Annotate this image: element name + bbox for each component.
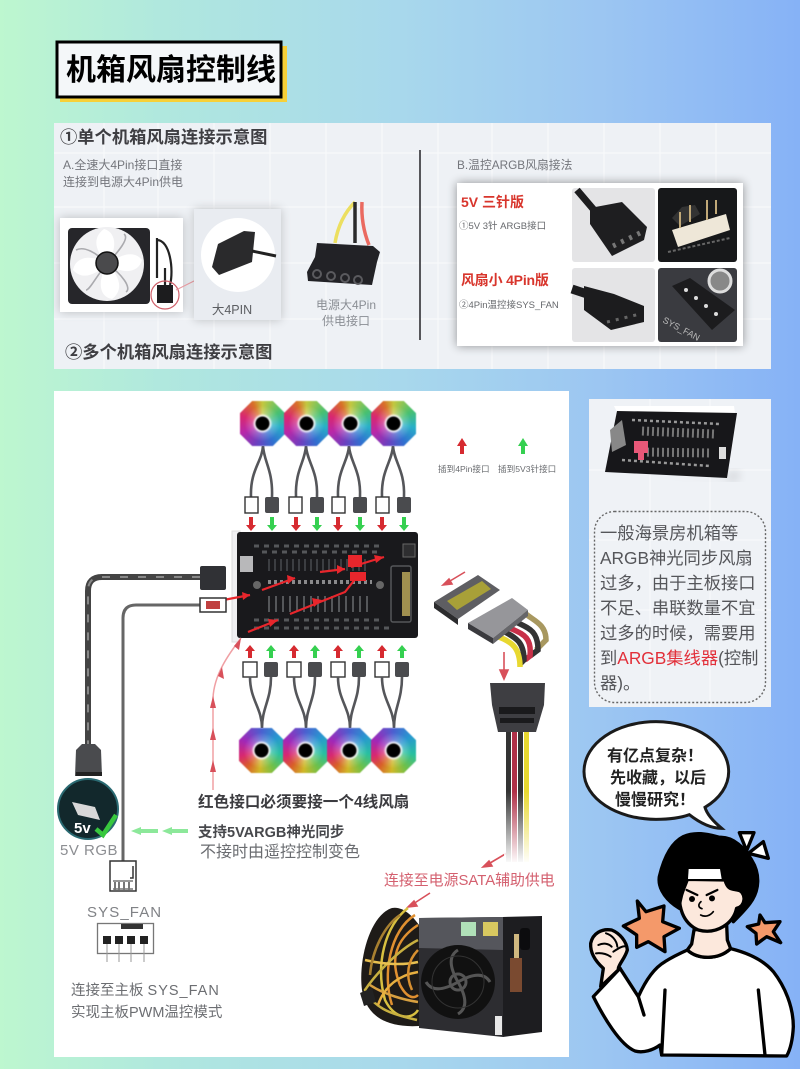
arrows: top row — [246, 517, 409, 531]
image: large 4-pin — [194, 209, 281, 320]
connector: SATA to molex adapter — [468, 598, 546, 667]
fans: bottom row — [238, 727, 417, 774]
callout: dashed note: ARGB神光同步风扇 — [600, 548, 753, 568]
label: 5V RGB: 5V RGB — [60, 842, 118, 859]
eyes — [689, 895, 715, 902]
wires: connectors to bottom fans — [250, 677, 402, 728]
panel: connection diagrams — [54, 123, 771, 369]
headband bow — [739, 833, 768, 858]
image: SYS_FAN header — [658, 268, 737, 343]
image: ARGB hub — [605, 406, 738, 480]
controller board — [218, 531, 418, 642]
fans: top row — [239, 400, 417, 447]
label: molex connector: 供电接口 — [322, 313, 370, 328]
cable: SYS_FAN — [123, 598, 226, 862]
speech bubble: 慢慢研究！ — [615, 790, 695, 809]
image: SYS_FAN header: SYS_FAN — [661, 315, 702, 343]
icon: big star — [623, 901, 679, 952]
callout: dashed note: 过多的时候，需要用 — [600, 623, 756, 643]
heading: multiple fans: ②多个机箱风扇连接示意图 — [65, 342, 272, 362]
wires: top fans to connectors — [251, 446, 404, 497]
image: molex power connector — [307, 202, 380, 285]
headband — [688, 869, 722, 879]
connector: SATA female — [434, 575, 500, 625]
connectors: bottom row — [243, 662, 409, 677]
badge: 5V header: 5v — [74, 820, 91, 837]
speech bubble: 有亿点复杂！ — [607, 746, 703, 765]
legend: arrow meaning: 插到4Pin接口 — [438, 463, 490, 474]
image: power supply — [360, 908, 542, 1037]
label: 5V version: 5V 三针版 — [461, 194, 524, 210]
label: SATA power: 连接至电源SATA辅助供电 — [384, 872, 555, 889]
connector: 5V plug — [75, 744, 102, 776]
image: 4-pin fan connector — [572, 268, 655, 342]
legend: arrow meaning: 插到5V3针接口 — [498, 463, 556, 474]
illustration: character — [591, 833, 793, 1056]
note: red port: 红色接口必须要接一个4线风扇 — [198, 792, 409, 811]
label: SYS_FAN: SYS_FAN — [87, 904, 162, 921]
badge: 5V header — [58, 779, 118, 839]
note: motherboard SYS_FAN: 连接至主板 SYS_FAN — [71, 983, 220, 999]
panel: ARGB hub explanation — [589, 399, 771, 707]
connectors: top row — [245, 497, 411, 513]
image: fan with cable — [60, 218, 208, 312]
label: molex connector: 电源大4Pin — [316, 298, 376, 312]
icon: small star — [747, 915, 781, 944]
note: 5V ARGB sync: 不接时由遥控控制变色 — [200, 843, 360, 861]
arrows: red port callout — [210, 638, 241, 790]
callout: dashed note: 器)。 — [600, 673, 640, 693]
face — [680, 870, 744, 931]
label: small 4-pin version: 风扇小 4Pin版 — [461, 272, 549, 288]
text: option A: 连接到电源大4Pin供电 — [63, 174, 183, 189]
note: motherboard SYS_FAN: 实现主板PWM温控模式 — [71, 1003, 223, 1021]
cable: 5V RGB — [88, 566, 226, 745]
body — [593, 949, 793, 1056]
diagram: SYS_FAN pins — [98, 924, 154, 962]
callout: dashed note: 一般海景房机箱等 — [600, 523, 738, 543]
callout: dashed note — [594, 512, 766, 702]
text: option A: A.全速大4Pin接口直接 — [63, 157, 182, 172]
note: 5V ARGB sync: 支持5VARGB神光同步 — [198, 824, 344, 841]
text: option B: B.温控ARGB风扇接法 — [457, 158, 573, 172]
image: large 4-pin: 大4PIN — [212, 303, 252, 317]
image: 3-pin connector — [572, 188, 655, 262]
callout: dashed note: 过多，由于主板接口 — [600, 573, 756, 593]
hair — [659, 834, 758, 922]
speech bubble — [584, 722, 729, 828]
card: ARGB connectors — [457, 183, 743, 346]
note: 5V ARGB: ①5V 3针 ARGB接口 — [459, 220, 546, 232]
note: 4-pin SYS_FAN: ②4Pin温控接SYS_FAN — [459, 299, 559, 311]
speech bubble: 先收藏，以后 — [610, 768, 706, 787]
hand — [591, 930, 627, 987]
panel: wiring diagram — [54, 391, 569, 1057]
connector: SYS_FAN plug — [110, 861, 136, 891]
arrows: bottom row — [245, 645, 407, 658]
image: ARGB header — [658, 188, 737, 262]
neck — [687, 925, 731, 957]
cable: SATA power — [490, 683, 545, 864]
title — [57, 42, 287, 102]
arrows: on board — [218, 557, 384, 632]
arrows: green pointers — [131, 827, 188, 835]
heading: single fan: ①单个机箱风扇连接示意图 — [60, 127, 267, 147]
callout: dashed note: 不足、串联数量不宜 — [600, 598, 756, 618]
arrows: SATA pointers — [408, 572, 508, 907]
title: 机箱风扇控制线 — [66, 54, 276, 87]
callout: dashed note: 到ARGB集线器(控制 — [600, 648, 758, 668]
legend: arrow meaning — [438, 438, 556, 474]
